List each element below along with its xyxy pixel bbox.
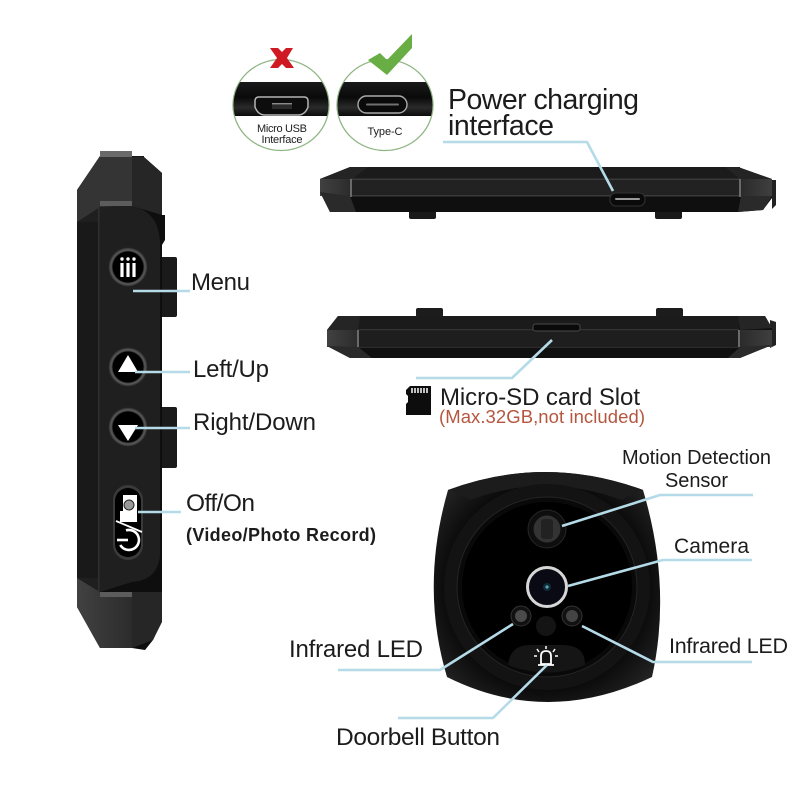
connector comparison: Type-C accepted [334,34,438,150]
Micro-SD slot [533,324,580,331]
device bottom edge view [327,308,776,358]
button: up [108,348,148,386]
label: motion detection sensor [622,447,771,492]
heading: power charging interface: Power charging [448,84,639,116]
device top edge view [320,167,776,219]
label: left/up: Left/Up [193,356,269,383]
device side view with buttons [77,151,177,650]
label: off/on: Off/On [186,490,255,517]
light sensor window [536,616,556,636]
leader line: motion sensor [562,495,753,526]
connector comparison: Micro USB rejected: Micro USB [257,123,307,135]
doorbell button with bell icon [508,645,585,672]
label: Micro-SD card slot: Micro-SD card Slot [440,384,640,411]
label: motion detection sensor: Sensor [665,470,728,492]
heading: power charging interface [448,84,639,142]
connector comparison: Micro USB rejected: Interface [262,134,302,146]
leader line: doorbell button [398,665,547,718]
leader line: menu [133,290,190,292]
button: power and record [113,485,143,560]
label: camera: Camera [674,535,749,558]
label: doorbell button: Doorbell Button [336,724,500,751]
leader line: right/down [135,427,190,429]
label: infrared LED left: Infrared LED [289,636,423,663]
infrared LED left [511,606,531,626]
connector comparison: Micro USB rejected [230,48,334,150]
button: menu [108,248,148,286]
label: right/down: Right/Down [193,409,316,436]
leader line: left infrared LED [338,624,513,670]
doorbell camera front view [434,472,660,702]
label: infrared LED right: Infrared LED [669,634,788,658]
heading: power charging interface: interface [448,110,554,142]
label: menu: Menu [191,269,250,296]
button: down [108,408,148,446]
label: Micro-SD card slot: (Max.32GB,not included) [439,406,645,427]
infrared LED right [562,606,582,626]
leader line: left/up [135,371,190,373]
camera lens [528,568,566,606]
leader line: Micro-SD slot [416,340,552,378]
connector comparison: Type-C accepted: Type-C [368,126,403,138]
label: motion detection sensor: Motion Detection [622,447,771,469]
leader line: camera [568,560,752,586]
leader line: off/on [138,511,181,513]
icon: Micro-SD card [406,386,431,415]
leader line: power charging [443,142,613,191]
USB-C port on top edge [610,193,645,206]
label: video/photo record: (Video/Photo Record) [186,525,376,545]
label: Micro-SD card slot [439,384,645,427]
motion detection sensor [528,510,566,548]
leader line: right infrared LED [582,626,752,662]
